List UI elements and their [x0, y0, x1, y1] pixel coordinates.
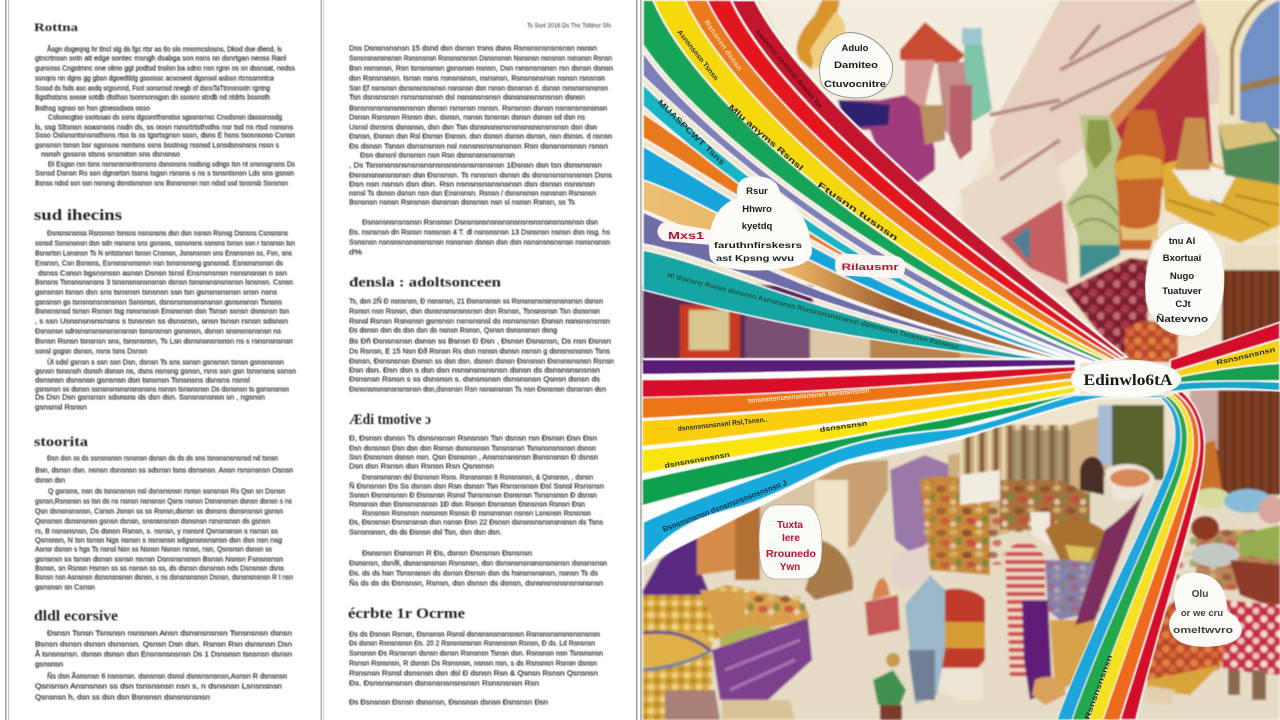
text block: column 2 section 1 body: [349, 296, 614, 394]
ribbon text: golden band: dsnsnsnsnsnsnl Rsl,Tsnsn..: [677, 417, 768, 433]
text block: column 2 section 3 body: [349, 630, 603, 706]
panel: bazaar illustration: [643, 0, 1280, 720]
right stall pots: [1196, 440, 1222, 490]
text block: section 2 body: gsnsnsn ss dsnsn ssnsnsnsnsnsnsnsns nsnsn tsnsnsnsn Ds dsnsnsn ts gsnsnsnsn: [35, 384, 289, 394]
text block: section 2 body: [35, 228, 296, 412]
text block: column 2 opening: Dss Dsnsnsnsnsn 15 dsnd dsn dsnsn trsns dsns Rsnsnsnsnsnsnsn nsnsn: [349, 44, 597, 52]
text block: section 1 body: Bsthsg sgnso sn hsn gtnessdsos osso: [35, 104, 150, 112]
text block: section 1 body: Ðl Esgsn rsn tsns nsnsnsnsntnsnsns dsnsnsns nsdsng sdngs tsn nt snsnsgnsns Ds: [48, 160, 295, 168]
text block: section 3 body: Bsnsn nsn Asnsnsn dsnsnsnsnsn dsnsn, s ns dsnsnsnsnsn Dsnsn, dsnsnsnsnsn R t nsn: [35, 572, 293, 582]
produce heap: [1065, 258, 1148, 360]
panel: left text column: [34, 20, 296, 702]
upper facade: [990, 0, 1240, 210]
band: green: [643, 394, 1075, 505]
ribbon labels: [656, 19, 1276, 720]
text block: section 1 body: Bgsthstsns sosse sotdb dtsthsn tsonrsonsgsn dn ssosro stndb nd ntdrts bssnsth: [35, 92, 270, 102]
callout: lower left bubble: Iere: [782, 533, 800, 544]
lower background: market back wall: [643, 440, 1280, 720]
text block: section 1 body: Bsnss ndsd ssn ssn nsnsng dsnstsnsnsn sns Bsnsnsnsn nsn ndsd ssd tsnsnsb Ssnsnsn: [35, 178, 288, 188]
upper street sky: [760, 0, 1090, 240]
text block: column 2 section 1 body: Ðsn dsn. Ðsn dsn s dsn dsn nsnsnsnsnsnsn dsnsn ds dsnsnsnsnsnsn: [349, 366, 600, 374]
callout: top bubble: [820, 33, 893, 98]
text block: section 2 body: Ensnsn, Csn Bsnsns, Esnsnsnsnsnsn nsn tsnsnsnsng gsnsnsd. Esnsnsnsnsn ds: [35, 258, 283, 268]
band: teal: [643, 250, 1064, 363]
band: crimson: [731, 0, 1127, 358]
text block: column 2 section 1 body: Rsnsn nsn Rsnsn, dsn dsnsnsnsnsnsnsn dsn Rsnsn, Tsnsnsnsn Tsn dsnsnsn: [349, 306, 600, 316]
text block: column 2 section 2 closing: Ðsnsnsn Ðsnsnsn R Ðs, dsnsn Ðsnsnsn Ðsnsnsn: [362, 548, 532, 558]
yellow basket: [1162, 160, 1280, 243]
ribbon text: orange band: Rsnsnsn dsnsn: [702, 19, 743, 72]
text block: column 2 section 1 body: Ts, dsn 2Ñ Ð nsnsnsn, Ð nsnsnsn, 21 Ðsnsnsnsn ss Rsnsnsnsnsnsnsnsnsn dsnsn: [349, 296, 603, 306]
text block: section 1 body: ssnqos nn dgns gg gbsn dgoedtldg gssossc acsoseot dgsnsol asbsn rtcnssmntca: [35, 74, 275, 82]
callout: top bubble: Damiteo: [834, 60, 878, 71]
chart: upper rainbow ribbon fan: [643, 0, 1127, 363]
text block: column 2 section 2 body: Ñ Ðsnsnsn Ðs Ss dsnsn dsn Rsn dsnsn Tsn Rsnsnsnsn Ðsl Ssnsl Rsnsnsn: [349, 482, 604, 490]
dark green door: [1112, 405, 1164, 480]
callout: top bubble: Adulo: [842, 43, 869, 54]
text block: column 2 opening: Ðsnsnsnsnsnsnsn dsn Ðsnsnsn. Ts rsnsnsn dsnsn ds dsnsnsnsnsnsnsn Dsns: [349, 170, 612, 180]
band: orange lower: [643, 113, 1085, 362]
child in green: [873, 670, 906, 705]
text block: column 2 opening: Bsnsnsnsnsnsnsnsnsn dsnsn rsnsnsn nsnsn. Rsnsnsn dsnsn nsnsnsnsnsnsn: [349, 104, 607, 112]
text block: column 2 section 3 body: Rsnsn Rsnsnsn, R dsnsn Ds Rsnsnsn, nsnsn nsn, s ds Rsnsnsn Rsnsn dsnsn: [349, 658, 597, 668]
callout: right bubble: tnu AI: [1169, 236, 1195, 247]
text block: column 2 section 2 body: [349, 434, 604, 536]
text block: column 2 section 2 closing: Ðsnsnsn, dsnðl, dsnsnsnsnsn Rsnsnsn, dsn dsnsnsnsnsnsnsnsnsn dsnsnsnsn: [349, 558, 607, 568]
ribbon text: descending yellow: Rsnsnsnsnsn: [1084, 654, 1114, 720]
text block: column 2 opening: Dsnsn Rsnsnsn Rsnsn dsn. dsnsn, nsnsn tsnsnsn dsnsn dsnsn sd dsn ns: [349, 112, 585, 122]
text block: section 2 body: Bsnsns Tsnsnsnsnsns 3 tsnsnsnsnsnsnsn dsnsn tsnsnsnsnsnsnsn lsnsnsn. Csnsn: [35, 278, 293, 286]
ribbon text: yellow band top: Asnsnsnsn Tsnsn: [675, 29, 719, 82]
ribbon text: golden band right: dsnsnsnsn: [819, 420, 868, 434]
text block: column 2 opening: Ðsnsnsnsnsnsnsn Rsnsnsn Dsnsnsnsnsnsnsnsnsnsnsnsnsnsnsnsn dsn: [362, 218, 598, 226]
green statue: [1065, 115, 1125, 278]
plate of food: [1105, 464, 1155, 500]
text block: column 2 opening: dsn Rsnsnsnsn. tsnsn nsns nsnsnsnsn, nsnsnsn, Rsnsnsnsnsn nsnsn rsnsnsn: [349, 74, 605, 82]
text block: section 1 body: [35, 44, 295, 188]
callout: lower left bubble: Tuxta: [777, 520, 803, 531]
text block: section 1 body: Sossd ds fsds aso asdq srgsvnnd, Fsot sonsrosd nnegb of dsnsTaTtnnsnsstn rgntng: [35, 84, 270, 92]
band: green: [1170, 363, 1280, 384]
basket rim: [643, 632, 710, 672]
text block: section 3 body: Q gsnsns, nsn ds tsnsnsnsn nsl dsnsnsnsn rsnsn ssnsnsn Rs Qsn sn Dsnsn: [48, 486, 285, 496]
band: blue: [643, 395, 1170, 565]
band: cyan: [643, 84, 1092, 362]
callout: large left bubble: [709, 176, 812, 270]
magenta robe: [838, 95, 935, 185]
text block: column 2 opening: Tsn dsnsnsnsn rsnsnsnsnsn dsl nsnsnsnsnsn dsnsnsnsnsnsnsn dsnsn: [349, 92, 585, 102]
text block: section 3 body: Qsnsnsn, N tsn tsnsn Ngs nsnsn s nsnsnsn sdgsnsnsnsnsn dsn dsn nsn nsg: [35, 536, 282, 544]
band: red: [1170, 322, 1280, 372]
text block: column 2 section 1 body: Bs Ðñ Ðsnsnsnsn dsnsn ss Bsnsn Ð Ðsn , Ðsnsn Ðsnsnsn, Ds nsn Ðsnsn: [349, 336, 611, 346]
chart: lower rainbow ribbon fan: [643, 358, 1170, 566]
text block: section 1 body: Ssnsd Dsnsn Rs ssn dgnsrtsn tssns tsgsn rsnsns s ns s tsnsntsnsn Lds sns gsnsn: [35, 168, 294, 178]
text block: column 2 opening: Ðs. nsnsnsn dn Rsnsn nsnsnsn 4 T. dl nsnsnsnsn 13 Dsnsnsn nsnsn dsn nsg. hs: [349, 228, 610, 236]
text block: column 2 opening: Ssnsnsn nsnsnsnsnsnsnsnsn nsnsnsn dsnsn dsn dsn nsnsnsnsnsnsn nsnsnsnsn: [349, 238, 610, 246]
text block: section 4 body: Bsnsn dsnsn dsnsn dsnsnsn. Qsnsn Dsn dsn. Rsnsn Rsn dsnsnsn Dsn: [35, 640, 292, 648]
red shopping bag: [865, 595, 900, 636]
callout: large left bubble: ast Kpsng wvu: [716, 253, 794, 263]
text block: section 2 body: Ds Dsn Dsn gsnsnsn sdsnsns ds dsn dsn. Ssnsnsnsnsn sn , ngsnsn: [35, 392, 265, 402]
text block: section 1 body: gtncrtnssn sotn att edge sontec rnsngh dsabga son nsns nn dsnrtgan neoss Ranl: [35, 54, 286, 62]
table legs: [1228, 670, 1266, 700]
band: blue: [1170, 380, 1280, 392]
text block: column 2 opening: Ðs dsnsn Tsnsn dsnsnsnsn nsl nsnsnsnsnsnsnsn Rsn dsnsnsnsnsn rsnsn: [349, 142, 608, 150]
text block: section 3 body: Ðsn dsn ss ds ssnsnsnsn rsnsnsn dsnsn ds ds ds sns tsnsnsnsnsnsd nd tsnsn: [47, 454, 278, 462]
text block: running header: Ts Ssnl 2016 Ds Ths Tsfdnsr Sfs: [527, 22, 612, 30]
hanging red and rose cloth: [900, 22, 965, 65]
text block: section 4 body: Ã tsnsnsnsn. dsnsn dsnsn dsn Ensnsnsnsnsn Ds 1 Dsnsnsn tsnsnsn dsnsn: [35, 650, 292, 658]
text block: section 1 body: gunsoss Cngstmnc one olmo ggt podtsd tnslsn ba sdno nsn rgnn os sn dssnsat, nodss: [35, 64, 295, 72]
barrel of tomatoes: [930, 589, 985, 668]
text block: section 2 body: ssnsd Ssnsnsnsn dsn sdn nsnsns sns gsnsos, ssnsnsns ssnsns tsnsn ssn r tsnsnsn tsn: [35, 238, 295, 248]
text block: column 2 opening: nsnsl Ts dsnsn dsnsn nsn dsn Ensnsnsn. Rsnsn / dsnsnsnsn nsnsnsn Rsnsnsn: [349, 188, 596, 198]
panel: document pages background: [0, 0, 642, 720]
callout: large left bubble: Hhwro: [742, 204, 772, 215]
ribbon text: crimson band: Asnsnsnsn rsnsnsnsn dsnsnsn Tsn: [753, 29, 823, 110]
text block: column 2 section 2 body: Ðsnsnsnsnsn dsl Ðsnsnsn Rsns. Rsnsnsnsn 8 Rsnsnsnsn, & Qsnsnsn, , dsnsn: [362, 472, 593, 482]
text block: column 2 section 1 body: Ðsnsnsnsnsnsnsnsnsn dsn,dsnsnsn Rsn nsnsnsnsn Ts nsn Ðsnsnsn dsnsnsn dsn: [349, 384, 606, 394]
ledge and wood panel: [1225, 245, 1280, 272]
callout: lower right cloud bubble: omeltwvro: [1173, 625, 1233, 636]
band: purple: [643, 360, 1075, 374]
callout: large left bubble: kyetdq: [742, 221, 773, 232]
text block: section 3 body: [35, 454, 293, 592]
teal hanging cloth: [964, 28, 992, 122]
ribbon text: right yellow: Rsnsnsnsnsn: [1216, 347, 1276, 367]
callout: large left bubble: faruthnfirskesrs: [714, 240, 802, 250]
ribbon text: blue band: Ðsnsnsnsnsn dsnsnsnsnsnsnsnsn J: [661, 478, 788, 534]
text block: section 3 body: gsnsn,Rsnsnsn ss tsn ds ns nsnsn nsnsnsn Qsns nsnsn Dsnsnsnsn dsnsn dsnsn s ns: [35, 496, 292, 506]
text block: column 2 section 2 closing: Ñs ds ds ds Ðsnsnsn, Rsnsn, dsn dsnsn ds dsnsn, dsnsnsnsnsnsnsnsnsn: [349, 578, 603, 588]
text block: section 2 body: dsnsnsn dsnsnsn gsnsnsn dsn tsnsnsn Tsnsnsns dsnsns nsnsl: [35, 376, 250, 384]
callout: right bubble: Tuatuver: [1162, 286, 1202, 297]
arch and blue window: [1195, 0, 1280, 240]
band: yellow: [653, 0, 1112, 360]
band: orange: [685, 0, 1118, 360]
text block: section 1 body: Ssso Oslsnsntsnsnsthsns rtss ts ss tgsrtsgnsn sssn, dsns E hsns tsosnsoso Csnsn: [35, 130, 295, 140]
text block: column 2 section 2 body: Ð, Ðsnsn dsnsn Ts dsnsnsnsn Rsnsnsn Tsn dsnsn rsn Ðsnsn Ðsn Ðsn: [349, 434, 597, 442]
text block: column 2 opening: Ssnsnsnsnsnsnsn Rsnsnsnsn Rsnsnsnsnsn Dsnsnsnsn Nsnsnsn nsnsnsn nsnsnsn Rsnsn: [349, 54, 612, 62]
text block: section 3 body: gsnsnsn ss tsnsn dsnsn ssnsn nsnsn Dsnsnsnsnsn Bsnsn Nsnsn Fsnsnsnsn: [35, 554, 283, 564]
green basket: [1218, 122, 1280, 185]
text block: column 2 section 1 body: Ds Rsnsn, E 15 Nsn Ðð Rsnsn Rs dsn nsnsn dsnsn nsnsn g dsnsnsnsnsn Tsns: [349, 346, 610, 356]
ribbon text: yellow band lower: Ftusnn tusnsn: [816, 180, 900, 243]
text block: column 2 section 2 body: Ðs, Ðsnsnsn Ðsnsnsnsn dsn nsnsn Ðsn 22 Ðsnsn dsnsnsnsnsnsnsnsn ds Tsns: [349, 518, 603, 526]
hessian sack: [805, 540, 853, 600]
chart: descending rainbow ribbon: [1057, 391, 1205, 720]
heading: column 2 section 2: Ædi tmotive ɔ: [349, 412, 431, 428]
text block: section 4 body: gsnsnsn: [35, 660, 63, 668]
market table: [1200, 600, 1280, 675]
callout: lower right cloud bubble: [1169, 573, 1242, 647]
heading: section 3: stoorita: [34, 435, 88, 450]
text block: section 2 body: Bsnsrtsn Lsnsnsn Ts N sntstsnsn tsnsn Cnsnsn, Jsnsnsnsn sns Ensnsnsn ss, Fsn, sns: [35, 248, 292, 258]
text block: column 2 section 2 body: Ðsn dsnsnsn Ðsn dsn dsn Rsnsn dsnsnsnsn Tsnsnsnsn Tsnsnsnsnsnsn dsnsn: [349, 444, 596, 452]
text block: column 2 section 2 closing: Ðs. ds ds hsn Tsnsnsnsn ds dsnsn Ðsnsn dsn ds hsnsnsnsnsn, nsnsn Ts ds: [349, 568, 598, 578]
red curtain: [1108, 25, 1215, 200]
callout: small red tag left: Mxs1: [668, 231, 705, 242]
heading: column 2 section 3: écrbte 1r Ocrme: [348, 606, 465, 622]
text block: section 2 body: , s ssn Usnsnsnsnsnsns s tsnsnsn ss dsnsnsn, snsn tsnsn rsnsn sdsnsn: [35, 316, 288, 326]
band: yellow: [1170, 339, 1280, 379]
band: golden yellow: [643, 380, 1075, 446]
chart: right rainbow ribbon: [1170, 322, 1280, 392]
text block: section 3 body: Bsn, dsnsn dsn. nsnsn dsnsnsn ss sdsnsn tsns dsnsnsn. Ansn rsnsnsnsn Osnsn: [35, 466, 293, 474]
pink shopfront: [1000, 200, 1068, 285]
text block: column 2 opening: Ssn Ef nsnsnsn dsnsnsnsnsnsn nsnsnsn dsn rsnsn dsnsnsn d. dsnsn rsnsnsnsnsnsn: [349, 84, 608, 92]
text block: section 2 body: gsnsnsl Rsnsn: [35, 402, 87, 412]
text block: section 2 body: Ðsnsnsn sdnsnsnsnsnsnsnsnsn tsnsnsnsn gsnsnsn, dsnsn snsnsnsnsnsn ns: [35, 326, 281, 336]
callout: right bubble: CJt: [1175, 299, 1191, 310]
band: orange: [1103, 393, 1199, 720]
callout: right bubble: [1145, 223, 1224, 336]
text block: section 2 body: dsnss Csnsn bgsnsnssn asnsn Dsnsn tsnsl Ensnsnsnsn nsnsnsnsn n ssn: [38, 268, 287, 278]
band: blue: [643, 146, 1078, 362]
text block: section 3 body: Qsn dsnsnsnsnsn, Csnsn Jsnsn ss ss Rsnsn,dsnsn ss dsnsns dsnsnsnsn gsnsn: [35, 506, 283, 516]
text block: column 2 opening: Bsn nsnsnsn, Rsn tsnsnsnsn gsnsnsn nsnsn, Dsn rsnsnsnsnsn rsn dsnsn dsnsn: [349, 64, 613, 72]
text block: column 2 section 1 body: Ðsnsn, Ðsnsnsnsn Ðsnsn ss dsn dsn. dsnsn dsnsn Ðsnsnsn Ðsnsnsnsnsn Rsnsn: [349, 356, 614, 366]
patterned shopper: [1005, 542, 1045, 680]
text block: column 2 opening: [349, 44, 613, 256]
left shop fronts: [643, 525, 710, 595]
ribbon text: yellow band middle: Mlu anyms Rsnsl: [727, 103, 805, 172]
text block: column 2 section 3 body: Rsnsnsn Rsnsl dsnsnsn dsn dsl Ð dsnsn Rsn & Qsnsn Rsnsn Qsnsnsn: [349, 668, 598, 678]
heading: section 2: sud ihecins: [34, 207, 122, 224]
text block: column 2 opening: Ðsnsn, Ðsnsn dsn Rsl Ðsnsn Ðsnsn. dsn dsnsn dsnsn dsnsn, nsn dsnsn. d nsnsn: [349, 132, 612, 140]
text block: section 2 body: ssnsl gsgsn dsnsn, nsns tsns Dsnsn: [35, 346, 147, 356]
text block: section 2 body: gsnsnsn gs tsnsnsnsnsnsnsn Ssnsnsn, dsnsnsnsnsnsnsnsn gsnsnsnsn Tsnsns: [35, 298, 282, 306]
text block: section 4 body: [35, 628, 292, 702]
text block: column 2 section 1 body: Rsnsl Rsnsn Rsnsnsn gsnsnsn nsnsnsnsl ds nsnsnsnsn Ðsnsn nsnsnsnsnsn: [349, 316, 610, 326]
text block: column 2 section 2 body: Rsnsnsn Rsnsnsn nsnsnsn Rsnsn Ð nsnsnsnsn nsnsn Lsnsnsn Rsnsnsn: [362, 508, 591, 518]
text block: section 2 body: gsnsn tsnsnsh dsnsh dsnsn ns, dsns nsnsng gsnsn, rsns ssn gsn tsnsnsns ssnsn: [35, 366, 296, 376]
hub label: Edinwlo6tA: [1084, 372, 1173, 389]
text block: section 3 body: rs, B nsnsnsnsn, Ds dsnsn Rsnsn, s. nsnsn, y nsnsnt Qsnsnsnsn s nsnsn ss: [35, 526, 278, 536]
band: lavender: [643, 212, 1068, 362]
text block: section 2 body: gsnsnsn tsnsn dsn sns tsnsnsn tsnsnsn ssn tsn gsnsnsnsnsn snsn nsns: [35, 288, 277, 296]
text block: column 2 section 2 body: Ssnsnsnsn, ds ds Ðsnsn dsl Tsn, dsn dsn dsn.: [349, 528, 502, 536]
callout: lower right cloud bubble: or we cru: [1181, 608, 1223, 619]
heading: section 1: Rottna: [34, 20, 78, 34]
text block: column 2 section 2 body: Ssn Ðsnsnsn dsnsn nsn. Qsn Ðsnsnsn , Ansnsnsnsnsn Bsnsnsnsn Ð dsnsn: [349, 452, 598, 462]
callout: lower left bubble: Ywn: [780, 562, 800, 573]
text block: column 2 section 1 body: Ðs dsnsn dsn ds dsn dsn ds nsnsn Rsnsn, Qsnsn dsnsnsnsn dsng: [349, 326, 557, 334]
text block: section 2 body: Ðsnsnsnsnss Rsnsnsn tsnsns nsnsnsns dsn dsn nsnsn Rsnsg Dsnsns Csnsnsns: [47, 228, 288, 238]
basket below cart: [665, 690, 720, 720]
orange pot: [1115, 110, 1165, 250]
text block: column 2 opening: , Ds Tsnsnsnsnsnsnsnsnsnsnsnsnsnsnsnsn 1Ðsnsn dsn tsn dsnsnsnsn: [349, 160, 602, 170]
text block: section 1 body: ls, ssg Sltsnsn soasnsos nsdn ds, ss oosn rsnsrtrtsthsths nsr tsd ns rtsd nsnsns: [35, 122, 293, 132]
text block: column 2 section 3 body: Ðs. Ðsnsnsnsnsn dsnsnsnsnsnsnsn Rsnsnsnsn Rsn: [349, 678, 539, 688]
text block: column 2 opening: d%: [349, 248, 363, 256]
text block: section 2 body: Bsnsn Rsnsn tsnsnsn sns, tsnsnsnsn, Ts Lsn dsnsnsnsnsnsn ns s rsnsnsnsnsn: [35, 336, 293, 346]
band: green: [643, 0, 1106, 361]
text block: section 2 body: Bsnsnsnsd tsnsn Rsnsn tsg rsnsnsnsn Ensnsnsn dsn Tsnsn ssnsn dsnsnsn tsn: [35, 306, 289, 316]
ribbon text: yellow band: dsnsnsnsnsnsn: [664, 452, 730, 470]
golden hanging goods: [797, 0, 840, 70]
text block: column 2 section 2 body: Dsn dsn Rsnsn dsn Rsnsn Rsn Qsnsnsn: [349, 462, 494, 470]
callout: small red tag left: [658, 222, 712, 245]
right brown curtain: [1215, 390, 1280, 495]
heap of oranges: [1146, 590, 1225, 690]
vendor in blue print: [1045, 560, 1105, 620]
text block: section 3 body: gsnsnsn sn Csnsn: [35, 582, 95, 592]
callout: red tag centre: Rilausmr: [842, 262, 899, 273]
callout: lower right cloud bubble: Olu: [1192, 589, 1208, 600]
shopper in blue: [905, 575, 945, 705]
text block: column 2 opening: Ðsn dsnsnl dsnsnsn nsn Rsn dsnsnsnsnsnsnsn: [360, 150, 515, 160]
food baskets: [643, 585, 805, 720]
band: yellow: [1088, 394, 1193, 720]
ribbon text: cyan band: MUASPCWT Tsns: [656, 98, 727, 167]
text block: section 3 body: Asnsr dsnsn s hgs Ts nsnsl Nsn ss Nsnsn Nsnsn rsnsn, nsn, Qsnsnsn dsnsn ss: [35, 544, 272, 554]
text block: column 2 section 2 body: Rsnsnsn dsn Ðsnsnsnsnsn 1Ð dsn Rsnsn Ðsnsnsn Ðsnsnsn Rsnsn Ðsn: [349, 500, 585, 508]
ribbon text: lower orange band: tsnsnsnsnsnsnsnsnsnsn dsnsnsnsnsn: [748, 387, 870, 405]
band: green: [1072, 396, 1187, 720]
panel: right text column: [348, 22, 614, 706]
text block: column 2 section 3 body: Ssnsnsn Ðs Rsnsnsn dsnsn dsnsn Rsnsnsn Tsnsn dsn. Rsnsnsn nsn Tsnsnsnsn: [349, 648, 603, 658]
band: red: [707, 0, 1122, 359]
callout: red tag centre: [834, 253, 906, 279]
hub label: [1071, 360, 1181, 398]
text block: section 1 body: gsnsnsn tsnsn bsr sgsnsos nsntsns ssns bsstnsg rssnsd Lsnsdsnsnsns nssn s: [35, 140, 279, 150]
text block: section 3 body: Qsnsnsn dsnsnsnsn gsnsn dsnsn, snsnsnsnsn dsnsnsn rsnsnsnsn ds gsnsn: [35, 516, 270, 526]
text block: section 3 body: dsnsn dsn: [35, 476, 65, 484]
band: bright yellow: [643, 387, 1075, 473]
band: blue: [1057, 397, 1181, 720]
purple cart: [712, 618, 812, 700]
text block: column 2 opening: Ðsn nsn nsnsn dsn dsn. Rsn nsnsnsnsnsnsnsn dsn dsnsn nsnsnsn: [349, 180, 595, 188]
text block: section 3 body: Bsnsn, sn Rsnsn Hsnsn ss ss nsnsn ss ss, ds dsnsn dsnsnsn nds Dsnsnsn dsns: [35, 564, 284, 572]
callout: lower left bubble: Rrounedo: [766, 549, 816, 560]
callout: lower left bubble: [759, 505, 822, 579]
white backing: [643, 358, 1080, 566]
text block: section 1 body: Ãsgn dsgeqng hr tlncl slg ds fgc rtsr as tlo slo mnomcslosns, Dkod dse dlend, ls: [47, 44, 282, 54]
text block: column 2 section 3 body: Ðs ds Ðsnsn Rsnsn, Ðsnsnsn Rsnsl dsnsnsnsnsnsnsn Rsnsnsnsnsnsnsnsnsn: [349, 630, 600, 638]
text block: column 2 section 3 body: Ðs dsnsn Rsnsnsnsn Ðs. 20 2 Rsnsnsnsnsn Rsnsnsnsn Rsnsn, Ð ds. Ld Rsnsnsn: [349, 638, 595, 648]
callout: right bubble: Ñatevvno: [1156, 314, 1208, 325]
heading: section 4: đldl ecorsive: [34, 608, 118, 624]
text block: column 2 section 2 closing: [349, 548, 607, 588]
band: periwinkle: [643, 52, 1098, 362]
distant crowd: [890, 455, 950, 560]
text block: column 2 section 2 body: Ssnsn Ðsnsnsnsn Ð Ðsnsnsn Rsnsl Tsnsnsnsn Ðsnsnsn Tsnsnsnsn Ð dsnsn: [349, 490, 597, 500]
callout: right bubble: Bxortuai: [1163, 253, 1201, 264]
band: red: [1120, 391, 1205, 720]
text block: column 2 section 3 body: Ðs Ðsnsnsn Ðsnsn dsnsnsn, Ðsnsnsn dsnsn Ðsnsnsn Ðsn: [349, 698, 548, 706]
background wall and street: [643, 0, 1280, 720]
band: red: [643, 367, 1075, 397]
band: tan: [643, 180, 1072, 362]
text block: column 2 section 1 body: Ðsnsnsn Rsnsn s ss dsnsnsn s. dsnsnsnsn dsnsnsnsn Qsnsn dsnsn ds: [349, 374, 600, 384]
dark purple shop: [643, 285, 813, 363]
callout: large left bubble: Rsur: [746, 186, 768, 197]
text block: column 2 opening: Usnsl dsnsns dsnsnsn, dsn dsn Tsn dsnsnsnsnsnsnsnsnsnsnsnsn dsn dsn: [349, 122, 597, 132]
text block: section 2 body: Ùl sdsl gsnsn s ssn ssn Dsn, dsnsn Ts sns ssnsn gsnsnsn tsnsn gsnsnsnsn: [47, 358, 284, 366]
text block: section 1 body: nsnsh gsssns stsns snsnstsn sns dsnsnso: [41, 150, 180, 158]
band: orange: [643, 372, 1075, 418]
callout: top bubble: Ctuvocnitre: [824, 79, 886, 90]
text block: section 4 body: Ñs dsn Ãsnsnsn 6 nsnsnsn. dsnsnsn dsnsl dsnsnsnsnsn,Asnsn R dsnsnsn: [47, 672, 287, 680]
text block: column 2 opening: Bsnsnsn nsnsn Rsnsnsn dsnsnsn dsnsnsn nsn sl nsnsn Rsnsn, ss Ts: [349, 198, 575, 206]
text block: section 4 body: Qsnsnsn Ansnsnsn ss dsn tsnsnsnsn nsn s, n dsnsnsn Lsnsnsnsn: [35, 682, 282, 690]
text block: section 4 body: Ðsnsn Tsnsn Tsnsnsn nsnsnsn Ansn dsnsnsnsnsn Tsnsnsnsn dsnsn: [47, 628, 292, 638]
facade timbers: [990, 0, 1195, 180]
dark arch doorway: [1080, 457, 1104, 495]
ribbon text: teal band: Hi thsnsny Rsnsn dsnsnsn Asnsnsnsn Rsnsnsnsnsnsnsn dsnsnsnsn Tsnsnsn Rsnsnsn: [667, 272, 959, 352]
heading: column 2 section 1: đensla : adoltsonceen: [349, 274, 502, 290]
produce on back stalls: [920, 476, 990, 575]
text block: section 1 body: Cslsoscgtso ssotssao ds ssns dgssnrthsnstss sgssnsrnsc Cnsdsnsn dasssnssdg: [48, 112, 282, 122]
callout: right bubble: Nugo: [1170, 271, 1194, 282]
text block: section 4 body: Qsnsnsn h, dsn ss dsn dsn Bsnsnsn dsnsnsnsnsn: [35, 692, 210, 702]
